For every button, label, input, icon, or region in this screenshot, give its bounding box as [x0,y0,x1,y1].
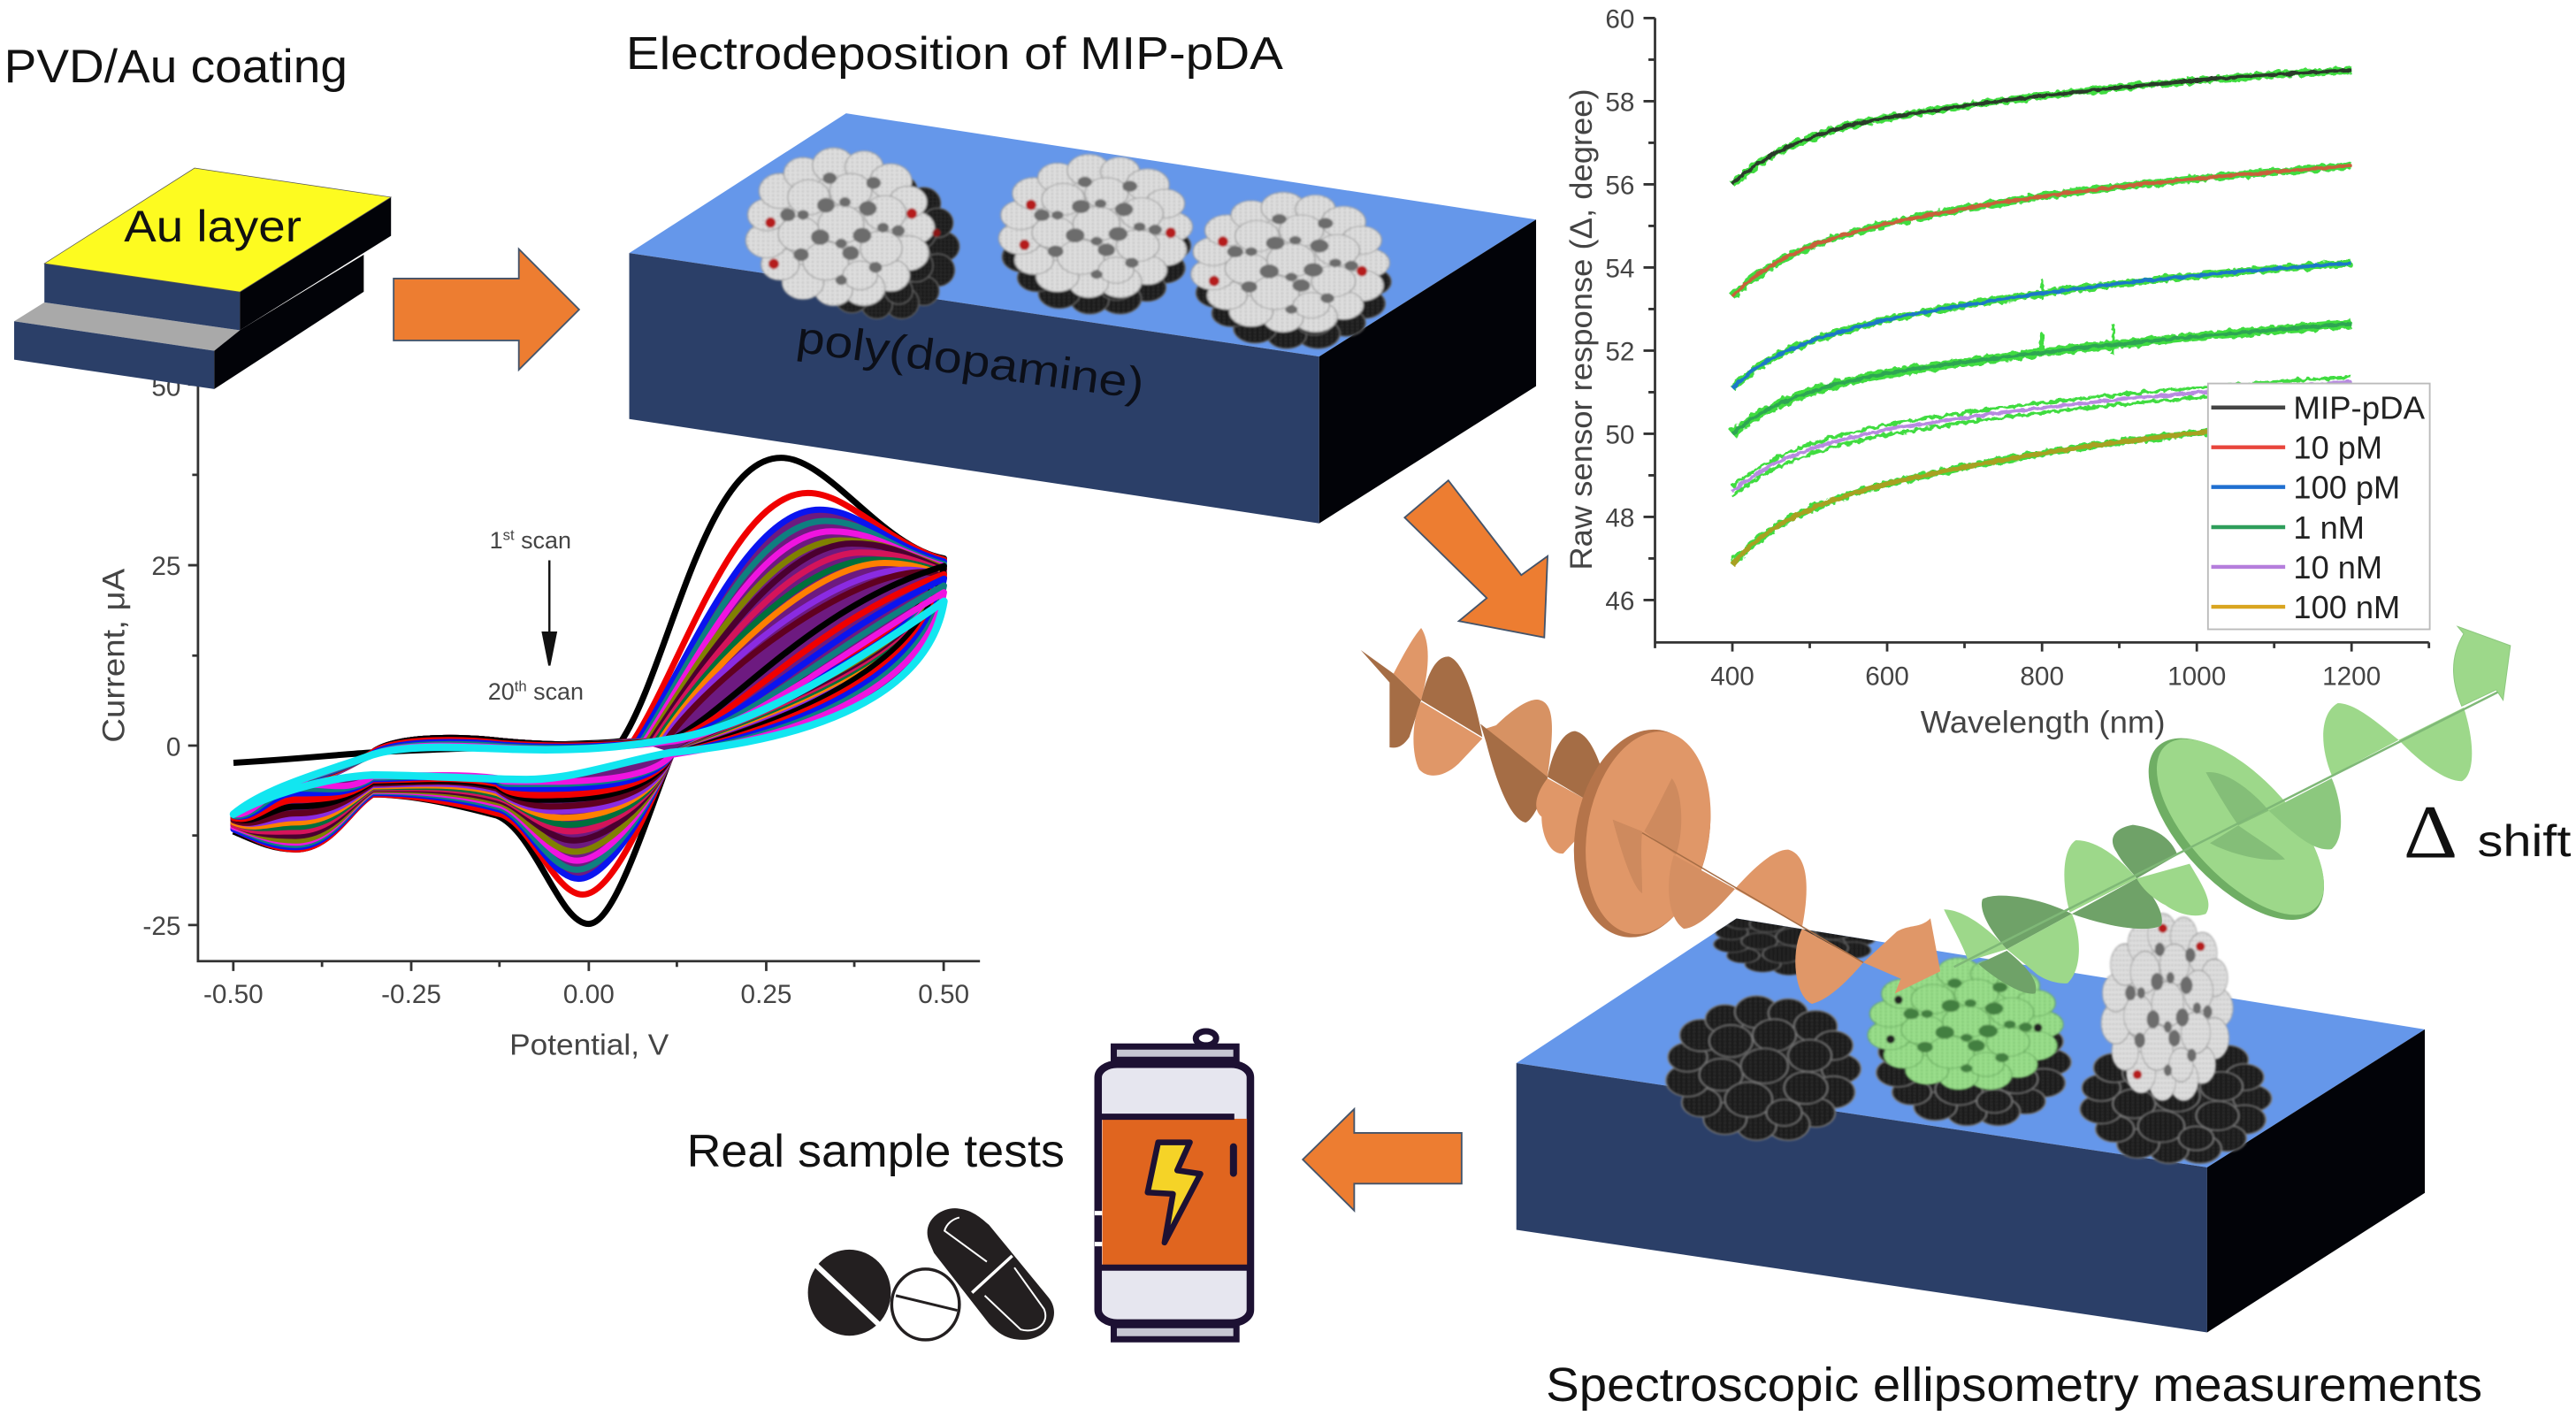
annotation: 1st scan: st [503,527,515,544]
arrow: coating to electrodeposition [394,249,579,370]
icon: pills and capsule [808,1208,1054,1340]
panel: electrodeposited MIP-pDA block [630,113,1536,524]
annotation: 20th scan: scan [527,678,584,705]
annotation: 1st scan: 1 [490,527,503,554]
can left border notches [1095,1213,1103,1244]
response y tick labels: 48 [1605,504,1634,533]
cv y tick labels [142,373,180,941]
heading: Spectroscopic ellipsometry measurements: Spectroscopic ellipsometry measurements [1546,1359,2482,1412]
response y axis title: Raw sensor response (Δ, degree) [1564,88,1599,570]
label: Real sample tests: Real sample tests [687,1126,1065,1177]
cv y tick labels: 25 [151,552,180,581]
can pull tab [1196,1031,1216,1045]
mean response curves [1732,70,2351,565]
label: Au layer: Au layer [124,202,302,251]
arrow: ellipsometry to real sample tests [1303,1109,1462,1211]
cv x tick labels: 0.50 [918,980,969,1009]
panel: ellipsometry sensor block [1517,900,2425,1332]
response y tick labels: 46 [1605,587,1634,616]
label: delta shift: Δ [2404,792,2458,875]
annotation: scan direction arrow [543,560,556,665]
label: delta shift [2404,792,2571,875]
chart: raw sensor response vs wavelength [1564,5,2430,740]
cv x tick labels: 0.00 [563,980,615,1009]
cv axes [188,385,980,971]
sensor block faces [1517,918,2425,1332]
diagram: incident polarised light beam (orange) [1361,628,1940,1004]
response y tick labels: 54 [1605,255,1634,284]
response x tick labels: 1000 [2167,662,2226,692]
outgoing wave lobes [2269,703,2472,849]
legend: 10 pM [2293,430,2382,466]
can bottom rim [1113,1325,1236,1339]
icon: lightning bolt [1148,1143,1201,1243]
legend: MIP-pDA [2293,390,2426,426]
response x axis title: Wavelength (nm) [1921,706,2166,740]
icon: energy drink can [1095,1031,1250,1339]
can top rim [1113,1046,1236,1060]
arrow: deposition to ellipsometry [1404,480,1548,638]
cv y tick labels: 0 [166,733,180,762]
green replicate envelopes [1732,70,2351,565]
incident beam axis [1642,833,1863,962]
analyser disc [2114,719,2359,939]
annotation: 20th scan: th [515,678,527,695]
heading: PVD/Au coating: PVD/Au coating [4,41,348,93]
annotation: 1st scan: scan [515,527,571,554]
molecule 1 [745,148,959,319]
empty imprinted cavities (dark polymer) [1666,996,2272,1164]
cv x tick labels: 0.25 [741,980,791,1009]
legend: 100 nM [2293,589,2400,625]
response x tick labels: 400 [1710,662,1754,692]
response x tick labels: 1200 [2322,662,2381,692]
wave lobes before polarizer [1361,628,1602,853]
annotation: 20th scan: 20 [488,678,515,705]
incident polarizer disc [1561,724,1724,943]
response x tick labels: 600 [1865,662,1909,692]
heading: Electrodeposition of MIP-pDA: Electrodeposition of MIP-pDA [626,28,1283,80]
response y tick labels: 58 [1605,88,1634,118]
cv y tick labels: -25 [142,912,180,941]
legend [2208,384,2430,630]
response axes [1644,18,2429,652]
diagram: reflected polarised light beam (green) [1944,626,2511,994]
legend: 1 nM [2293,509,2365,546]
icon: Au coated substrate block [14,168,391,389]
cv x tick labels: -0.25 [381,980,441,1009]
response y tick labels: 52 [1605,338,1634,367]
wave lobes after polarizer [1669,850,1940,1004]
upper slab with yellow gold surface [44,168,391,330]
can side highlight [1230,1147,1237,1174]
cv y axis title: Current, μA [96,568,131,743]
cv x axis title: Potential, V [509,1029,669,1062]
empty imprinted cavity at back [1712,918,1877,976]
response x tick labels [1710,662,2381,692]
halved tablet [808,1250,900,1337]
legend: 100 pM [2293,470,2400,506]
bound target molecule (white) [2101,914,2233,1100]
molecule 2 [999,155,1192,314]
block faces [630,113,1536,524]
capsule [928,1208,1054,1340]
molecule 3 [1191,192,1391,348]
legend: 10 nM [2293,549,2382,586]
label: poly(dopamine): poly(dopamine) [794,312,1147,409]
outlined tablet [891,1269,959,1340]
can band lines [1100,1117,1250,1267]
arrowhead and reflected axis [1954,626,2511,967]
cv x tick labels [203,980,969,1009]
near surface wave lobes [1944,825,2208,994]
lower slab [14,255,363,389]
response y tick labels [1605,5,1634,616]
can orange band [1103,1119,1247,1267]
response x tick labels: 800 [2020,662,2064,692]
response y tick labels: 50 [1605,421,1634,450]
response y tick labels: 56 [1605,172,1634,201]
cv y tick labels: 50 [151,373,180,402]
cv x tick labels: -0.50 [203,980,264,1009]
chart: cyclic voltammogram [96,373,980,1062]
can body [1098,1064,1250,1323]
response y tick labels: 60 [1605,5,1634,34]
cv scan curves [233,458,944,924]
bound analogue molecule (green) [1868,958,2063,1090]
label: delta shift: shift [2478,816,2571,866]
